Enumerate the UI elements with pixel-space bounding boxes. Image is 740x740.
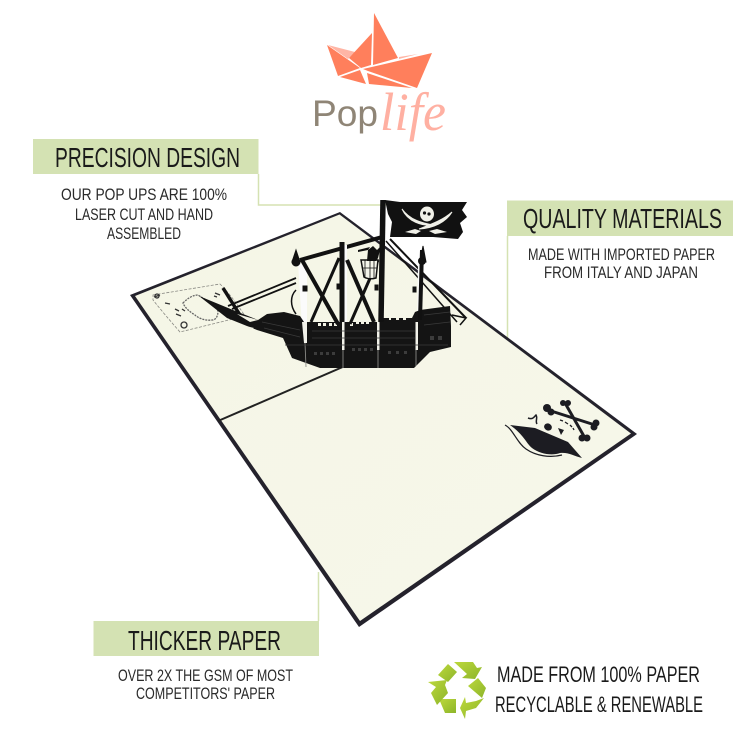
logo wordmark: Pop <box>312 93 378 134</box>
ship rigging <box>223 237 466 325</box>
logo wordmark <box>312 82 446 142</box>
text: thicker paper body: OVER 2X THE GSM OF MOST <box>118 667 293 685</box>
connector lines <box>258 174 508 621</box>
icon: recycle symbol <box>428 662 486 719</box>
card paper <box>135 214 631 621</box>
skull and sabres <box>402 206 452 234</box>
heading: thicker paper <box>94 621 319 656</box>
text: precision design body: OUR POP UPS ARE 100% <box>61 186 227 204</box>
pirate ship <box>199 200 467 368</box>
text: thicker paper body: COMPETITORS' PAPER <box>136 685 275 703</box>
pirate flag <box>385 200 467 239</box>
logo: Poplife <box>312 13 446 142</box>
text: quality materials body <box>528 246 715 282</box>
callout: thicker paper <box>94 621 319 703</box>
card border <box>130 212 637 627</box>
text: precision design body <box>61 186 227 243</box>
sails <box>298 245 423 343</box>
heading: thicker paper: THICKER PAPER <box>128 625 281 656</box>
heading: precision design <box>33 139 258 174</box>
logo wordmark: life <box>380 82 446 142</box>
text: precision design body: LASER CUT AND HAND <box>75 206 213 224</box>
callout: precision design <box>33 139 258 243</box>
hull detail lines <box>262 312 450 345</box>
crow's nest with lookout <box>358 246 381 279</box>
text: recyclable claim <box>495 662 703 717</box>
masts and cross braces <box>292 200 426 324</box>
icon: pirate hat and crossbones <box>505 400 600 458</box>
text: precision design body: ASSEMBLED <box>107 225 181 243</box>
port holes <box>314 336 442 355</box>
text: quality materials body: FROM ITALY AND JAPAN <box>544 264 698 282</box>
callout: recyclable <box>428 662 703 719</box>
callout: quality materials <box>507 200 733 282</box>
fold line <box>218 366 345 421</box>
icon: origami boat <box>327 13 432 88</box>
deck openings <box>237 314 406 330</box>
sail edges over hull <box>302 322 418 350</box>
panel: pop-up card <box>130 212 637 627</box>
text: thicker paper body <box>118 667 293 703</box>
treasure map <box>153 284 245 332</box>
heading: precision design: PRECISION DESIGN <box>55 142 240 173</box>
ship hull <box>199 296 451 368</box>
